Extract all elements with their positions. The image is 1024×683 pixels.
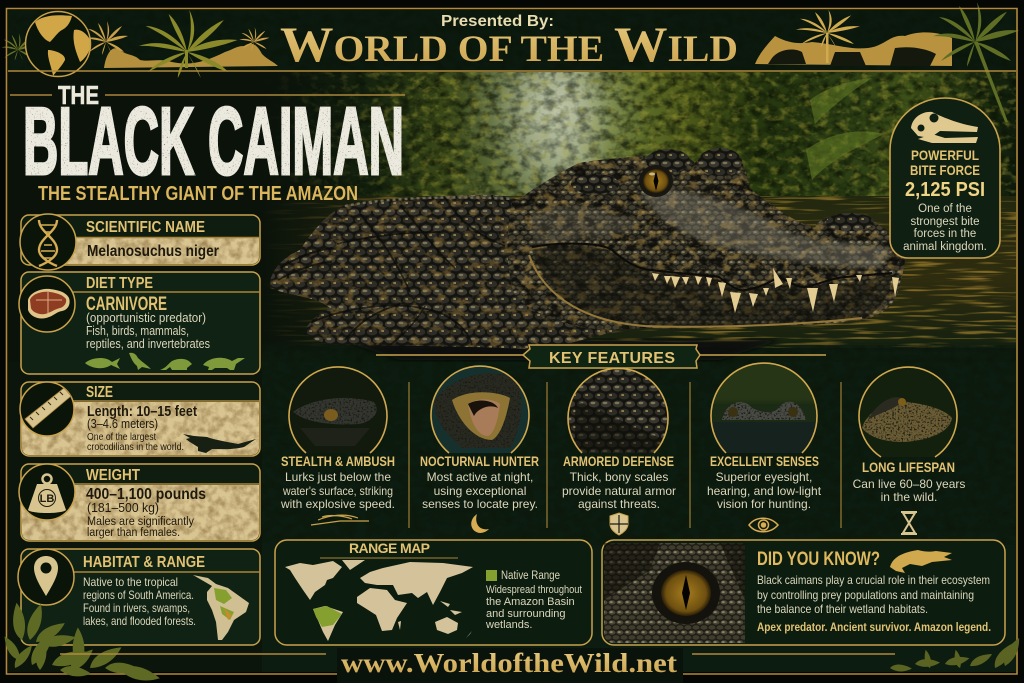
jungle silhouette left	[104, 44, 278, 68]
bite number: 2,125 PSI	[905, 179, 985, 201]
feature text: Lurks just below the	[285, 470, 391, 484]
caiman body mottling	[270, 195, 620, 350]
feature text: Most active at night,	[427, 470, 533, 484]
habitat line 1: Native to the tropical	[83, 575, 178, 589]
jungle silhouette right	[755, 32, 952, 66]
feature: nocturnal hunter: senses to locate prey.	[422, 497, 538, 511]
publisher name: WORLD OF THE WILD	[280, 16, 738, 72]
panel: range map	[275, 540, 592, 645]
feature heading: EXCELLENT SENSES	[710, 453, 819, 469]
caiman teeth	[652, 268, 899, 313]
heading: SCIENTIFIC NAME	[86, 219, 205, 236]
caiman body	[270, 195, 620, 350]
kg: (181–500 kg)	[87, 500, 159, 515]
panel: diet type	[19, 272, 260, 374]
feature: armored defense: against threats.	[578, 497, 660, 511]
title block	[10, 80, 405, 205]
note line 1: One of the largest	[87, 432, 156, 443]
caiman reflection	[340, 340, 780, 360]
panel: range map: wetlands.	[485, 619, 532, 631]
did you know text: Black caimans play a crucial role in their ecosystem	[757, 573, 990, 587]
website footer	[60, 648, 895, 683]
feature: long lifespan	[853, 362, 965, 534]
subtitle: THE STEALTHY GIANT OF THE AMAZON	[38, 183, 358, 205]
palm gold right	[796, 10, 860, 63]
feature heading: NOCTURNAL HUNTER	[420, 453, 539, 469]
lower background grain	[262, 345, 1016, 545]
world map	[285, 560, 473, 641]
icon: hourglass	[901, 512, 917, 534]
icon: eye	[749, 518, 778, 532]
caiman jaw rim	[529, 255, 862, 327]
feature heading: STEALTH & AMBUSH	[281, 453, 395, 469]
panel: did you know: the balance of their wetland habitats.	[757, 602, 928, 616]
divider	[70, 571, 260, 573]
feature: excellent senses	[705, 360, 823, 532]
website footer: www.WorldoftheWild.net	[341, 648, 677, 678]
feature image	[293, 398, 377, 446]
diet text: (opportunistic predator)	[86, 311, 206, 325]
hero photograph: jungle river	[274, 72, 1016, 348]
heading: HABITAT & RANGE	[83, 554, 205, 571]
panel: range map: the Amazon Basin	[486, 596, 575, 608]
diet line 2: Fish, birds, mammals,	[86, 324, 189, 338]
heading rule	[320, 557, 458, 559]
decoration: corner foliage right	[890, 636, 1020, 675]
feature: long lifespan: in the wild.	[881, 490, 937, 504]
caiman head	[507, 150, 905, 329]
heading: RANGE MAP	[349, 540, 430, 556]
icon: ripple	[311, 515, 369, 525]
feature image	[712, 364, 816, 453]
caiman brow and nostril bumps	[571, 148, 874, 231]
icon: ruler	[20, 382, 74, 436]
caiman snout highlight	[640, 189, 892, 268]
the: THE	[58, 80, 99, 110]
fern left edge	[1, 33, 36, 60]
panel: powerful bite force: animal kingdom.	[903, 241, 987, 253]
header bar	[1, 2, 1019, 122]
caiman cheek	[530, 206, 640, 246]
palm green right	[933, 2, 1019, 122]
heading: DID YOU KNOW?	[757, 549, 880, 570]
panel: powerful bite force	[890, 98, 1000, 258]
caiman mouth line	[532, 244, 892, 290]
icon: location pin	[18, 549, 74, 605]
panel: powerful bite force: forces in the	[914, 228, 976, 240]
black caiman	[270, 148, 905, 360]
parchment area	[21, 402, 259, 455]
panel: range map: and surrounding	[486, 608, 566, 620]
key features banner: KEY FEATURES	[549, 350, 675, 367]
heading: DIET TYPE	[86, 275, 153, 292]
value: Melanosuchus niger	[87, 243, 219, 260]
panel: weight	[19, 464, 260, 541]
habitat line 2: regions of South America.	[83, 588, 194, 602]
feature: stealth and ambush	[280, 360, 400, 525]
divider	[70, 483, 260, 485]
panel: habitat and range	[18, 549, 260, 645]
globe icon	[26, 12, 91, 76]
icon: weight: LB	[40, 493, 54, 505]
icon: dna	[20, 214, 76, 270]
animal shadows right	[768, 47, 936, 66]
legend swatch	[486, 570, 497, 581]
native range on map	[313, 606, 342, 627]
metric: (3–4.6 meters)	[87, 417, 158, 431]
title rule	[10, 94, 405, 96]
panel: did you know: by controlling prey populations and maintaining	[757, 588, 974, 602]
icon: rodent	[160, 359, 192, 370]
legend text: Widespread throughout	[486, 584, 582, 596]
parchment area	[21, 485, 259, 540]
feature: excellent senses: vision for hunting.	[717, 497, 811, 511]
decoration: corner foliage left	[0, 602, 160, 683]
eye closeup image	[604, 543, 745, 643]
length: Length: 10–15 feet	[87, 403, 197, 420]
panel: size	[20, 382, 260, 456]
feature: nocturnal hunter	[420, 360, 539, 533]
publisher line: Presented By:	[441, 13, 554, 30]
bite text: One of the	[918, 203, 972, 215]
caiman head dark mottling	[507, 150, 905, 329]
black caiman title: BLACK CAIMAN	[23, 88, 404, 195]
feature dividers	[409, 382, 841, 528]
parchment strip	[60, 238, 259, 264]
pounds: 400–1,100 pounds	[86, 486, 206, 503]
key features banner	[376, 345, 826, 368]
divider	[70, 400, 260, 402]
note line 1: Males are significantly	[87, 516, 194, 528]
divider	[60, 236, 260, 238]
feature text: Superior eyesight,	[716, 470, 812, 484]
icon: skull	[911, 112, 978, 143]
icon: meat	[19, 276, 75, 332]
caiman head gold mottling	[507, 150, 905, 329]
feature text: Thick, bony scales	[570, 470, 668, 484]
icon: shield	[610, 513, 628, 535]
icon: bird	[129, 353, 151, 370]
divider	[70, 291, 260, 293]
caiman eye	[639, 165, 673, 197]
feature: stealth and ambush: with explosive speed.	[280, 497, 395, 511]
caiman crest	[345, 197, 512, 206]
bite heading 1: POWERFUL	[911, 147, 979, 163]
panel: did you know	[602, 540, 1005, 645]
icon: crocodile silhouette	[183, 434, 256, 453]
feature: armored defense: provide natural armor	[562, 484, 676, 498]
feature: armored defense	[562, 365, 676, 535]
bite heading 2: BITE FORCE	[910, 162, 980, 178]
legend label: Native Range	[501, 570, 560, 582]
icon: fish	[85, 358, 120, 369]
feature text: Can live 60–80 years	[853, 477, 965, 491]
caiman scale ridges	[278, 198, 505, 345]
habitat line 3: Found in rivers, swamps,	[83, 601, 190, 615]
palm small left	[85, 21, 269, 55]
habitat line 4: lakes, and flooded forests.	[83, 614, 196, 628]
panel: scientific name	[20, 214, 260, 270]
carnivore: CARNIVORE	[86, 294, 167, 315]
map: south america	[193, 575, 249, 640]
feature: stealth and ambush: water's surface, striking	[282, 484, 393, 498]
heading: SIZE	[86, 384, 113, 401]
lower features background	[262, 362, 1016, 672]
feature image	[568, 369, 668, 453]
note line 2: larger than females.	[87, 527, 180, 539]
feature: excellent senses: hearing, and low-light	[707, 484, 822, 498]
icon: moon	[471, 514, 489, 533]
caiman lower jaw shadow	[532, 246, 892, 327]
feature heading: ARMORED DEFENSE	[563, 453, 674, 469]
icon: turtle	[203, 358, 245, 370]
feature image	[432, 367, 528, 453]
feature heading: LONG LIFESPAN	[862, 459, 955, 475]
diet line 3: reptiles, and invertebrates	[86, 337, 210, 351]
note line 2: crocodilians in the world.	[87, 442, 184, 453]
feature image	[862, 374, 954, 456]
icon: caiman	[890, 550, 952, 573]
icon: weight	[19, 464, 75, 520]
heading: WEIGHT	[86, 467, 140, 484]
feature: nocturnal hunter: using exceptional	[434, 484, 526, 498]
panel: powerful bite force: strongest bite	[910, 216, 980, 228]
palm left	[139, 10, 238, 78]
